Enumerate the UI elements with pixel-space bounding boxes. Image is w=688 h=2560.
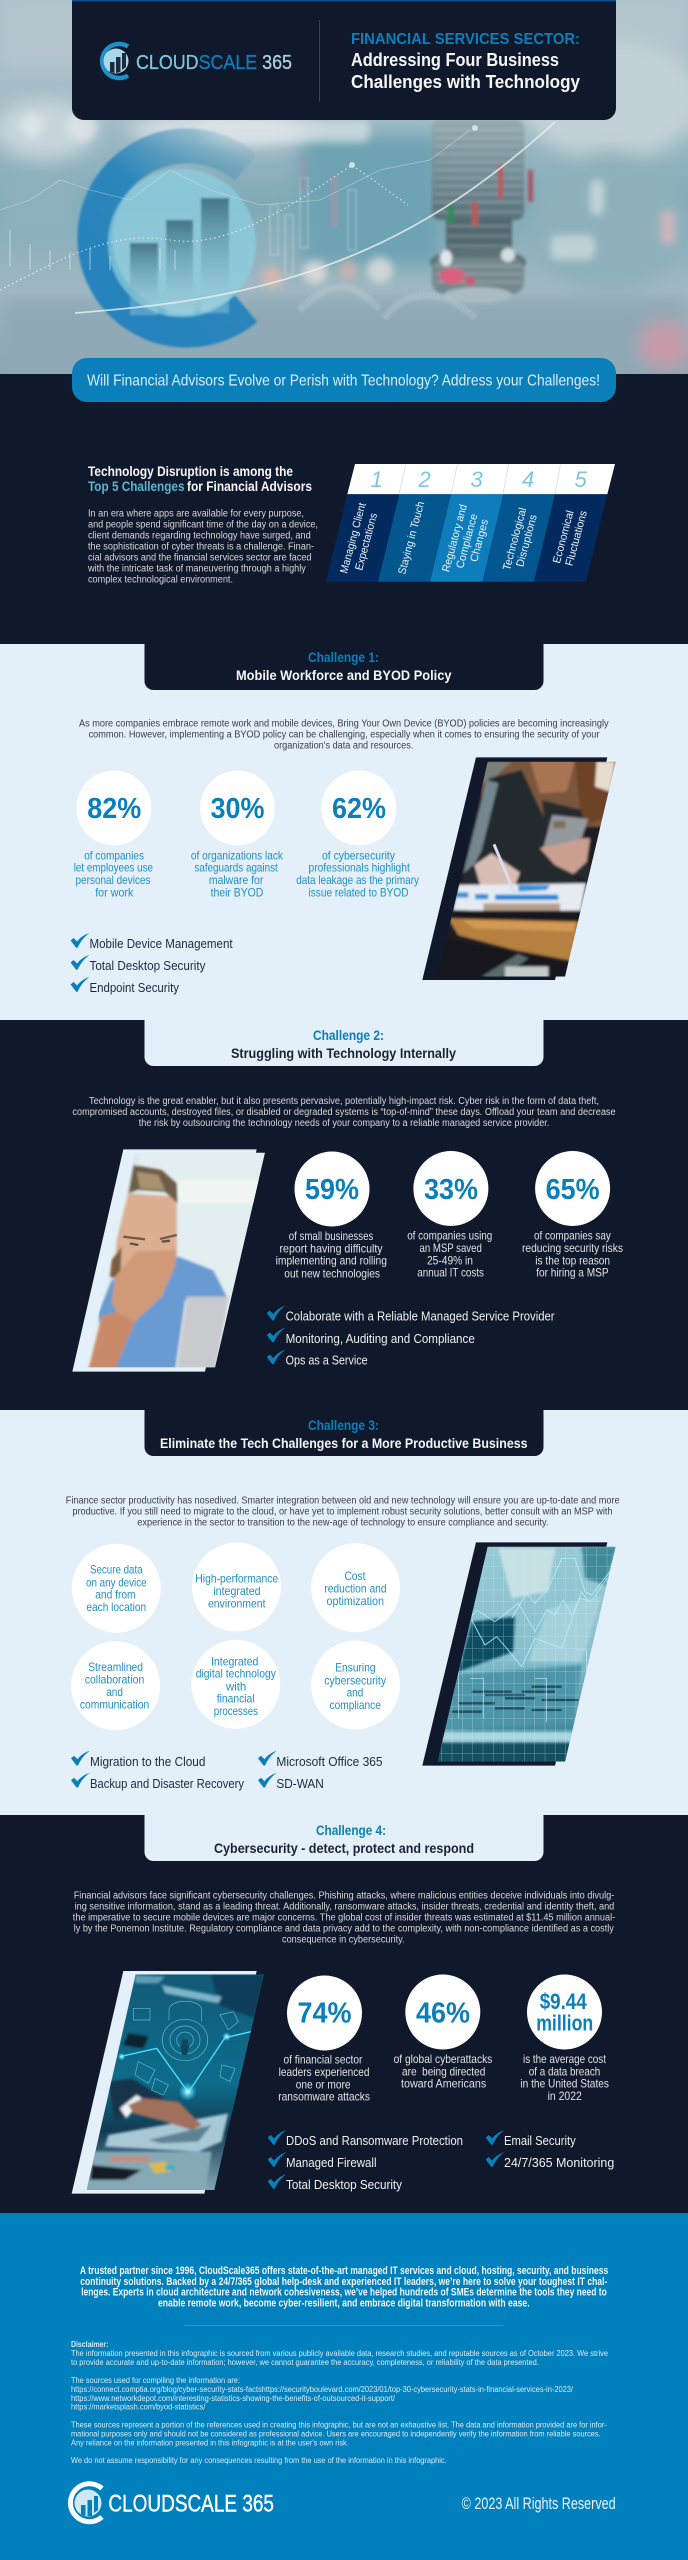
- stat: $9.44 million: in 2022: [548, 2090, 582, 2103]
- stat: 65%: reducing security risks: [522, 1242, 623, 1255]
- stat: 30%: safeguards against: [194, 862, 278, 875]
- benefit: cost reduction: Cost: [344, 1570, 366, 1583]
- stat: 62%: [296, 770, 419, 899]
- top 5 challenges table: Regulatory and: [440, 503, 470, 573]
- panel: challenge 4: [72, 1815, 615, 2194]
- intro body text: with the intricate task of maneuvering through a highly: [87, 563, 306, 574]
- stat: 65%: [522, 1151, 623, 1280]
- stat: 74%: 74%: [298, 1998, 352, 2030]
- top 5 challenges table: Compliance: [454, 513, 480, 570]
- stat: 30%: [191, 770, 283, 899]
- challenge 4 text: consequence in cybersecurity.: [282, 1935, 405, 1946]
- checklist: challenge 4 services: DDoS and Ransomware Protection: [286, 2133, 463, 2148]
- checklist: challenge 2 services: Monitoring, Auditing and Compliance: [286, 1331, 475, 1346]
- stat: 62%: 62%: [332, 793, 386, 825]
- challenge 2 text: the risk by outsourcing the technology needs of your company to a reliable managed service provider.: [139, 1118, 549, 1129]
- heading tab: challenge 4: Cybersecurity - detect, protect and respond: [214, 1840, 474, 1856]
- photo: woman with phone: [422, 757, 622, 980]
- checklist: challenge 1 services: [71, 933, 233, 995]
- big logo C ring: [95, 146, 256, 330]
- stat: 46%: of global cyberattacks: [394, 2053, 492, 2066]
- checklist: challenge 1 services: Endpoint Security: [90, 980, 179, 995]
- stat: 59%: report having difficulty: [280, 1242, 383, 1255]
- challenge 3 text: [66, 1496, 620, 1529]
- intro body text: client demands regarding technology have surged, and: [88, 530, 311, 541]
- stat: 74%: one or more: [296, 2078, 351, 2091]
- intro body text: cial advisors and the financial services sector are faced: [88, 552, 312, 563]
- stat: 82%: let employees use: [74, 862, 153, 875]
- dark intro band background: [0, 374, 688, 644]
- benefit: secure data: and from: [95, 1589, 136, 1602]
- stat: 59%: [276, 1152, 387, 1280]
- intro heading: [88, 463, 312, 494]
- checklist: challenge 1 services: Total Desktop Security: [90, 958, 206, 973]
- top 5 challenges table: [326, 464, 615, 582]
- checklist: challenge 4 services: Total Desktop Security: [286, 2177, 402, 2192]
- benefit: cost reduction: optimization: [326, 1595, 384, 1608]
- stat: 33%: an MSP saved: [420, 1242, 482, 1255]
- disclaimer: These sources represent a portion of the references used in creating this infographic, but are not an exhaustive list. The data and information provided are for infor-: [71, 2420, 607, 2430]
- intro body text: In an era where apps are available for every purpose,: [88, 508, 304, 519]
- benefit: secure data: on any device: [86, 1576, 147, 1589]
- challenge 2 text: Technology is the great enabler, but it also presents pervasive, potentially high-impact risk. Cyber risk in the form of data theft,: [89, 1096, 599, 1107]
- heading tab: challenge 2: Struggling with Technology Internally: [231, 1045, 456, 1061]
- disclaimer: The information presented in this infographic is sourced from various publicly available data, research studies, and reputable sources as of October 2023. We strive: [71, 2349, 609, 2358]
- stat: 30%: their BYOD: [211, 886, 263, 899]
- benefit: cybersecurity and compliance: cybersecurity: [324, 1674, 386, 1687]
- stat: 33%: 33%: [424, 1174, 478, 1206]
- top 5 challenges table: Managing Client: [338, 502, 369, 575]
- photo: laptop with financial chart overlay: [422, 1542, 622, 1766]
- photo: worried man at laptop: [72, 1149, 272, 1372]
- heading tab: challenge 3: Challenge 3:: [308, 1417, 379, 1433]
- benefit: collaboration: [71, 1641, 160, 1730]
- stat: $9.44 million: million: [536, 2010, 593, 2036]
- checklist: challenge 3 services: [71, 1751, 383, 1791]
- checklist: challenge 2 services: [267, 1306, 555, 1368]
- challenge 2 text: compromised accounts, destroyed files, or disabled or degraded systems is “top-of-mind” these days. Offload your team and decrease: [72, 1107, 616, 1118]
- challenge 4 text: [73, 1890, 615, 1946]
- heading tab: challenge 2: Challenge 2:: [313, 1027, 384, 1043]
- company statement: [80, 2265, 608, 2310]
- checklist: challenge 4 services: Managed Firewall: [286, 2155, 377, 2170]
- question banner pill: [72, 358, 616, 402]
- challenge 4 text: Financial advisors face significant cybersecurity challenges. Phishing attacks, where malicious entities deceive individuals into divulg-: [74, 1890, 614, 1901]
- benefit: secure data: Secure data: [90, 1564, 143, 1577]
- benefit: collaboration: Streamlined: [88, 1661, 143, 1674]
- top 5 challenges table: 1: [370, 467, 383, 492]
- benefit: integrated digital technology: processes: [214, 1705, 258, 1718]
- stat: 82%: for work: [95, 886, 134, 899]
- intro body text: and people spend significant time of the day on a device,: [88, 519, 318, 530]
- stat: 62%: issue related to BYOD: [308, 886, 408, 899]
- benefit: integrated digital technology: Integrated: [211, 1655, 258, 1668]
- stat: 74%: [278, 1976, 370, 2104]
- heading tab: challenge 2: [144, 1020, 544, 1066]
- stat: 59%: 59%: [305, 1174, 359, 1206]
- checklist: challenge 3 services: Migration to the Cloud: [90, 1754, 205, 1769]
- panel: challenge 3: [0, 1410, 688, 1815]
- intro body text: [87, 508, 318, 586]
- challenge 3 text: productive. If you still need to migrate to the cloud, or have yet to implement robust security solutions, better consult with an MSP with: [72, 1506, 612, 1517]
- stat: $9.44 million: [520, 1974, 609, 2103]
- stat: 74%: ransomware attacks: [278, 2091, 370, 2104]
- disclaimer: https://connect.comptia.org/blog/cyber-security-stats-factshttps://securityboulevard.com/2023/01/top-30-cybersecurity-stats-in-financial-services-in-2023/: [71, 2385, 574, 2394]
- stat: $9.44 million: is the average cost: [523, 2053, 607, 2066]
- stat: 65%: for hiring a MSP: [536, 1267, 609, 1280]
- stat: 82%: personal devices: [76, 874, 151, 887]
- disclaimer: The sources used for compiling the information are:: [71, 2376, 240, 2385]
- stat: 46%: toward Americans: [401, 2078, 486, 2091]
- stat: 33%: 25-49% in: [427, 1254, 473, 1267]
- intro heading: Technology Disruption is among the: [88, 463, 293, 479]
- stat: 65%: 65%: [546, 1174, 600, 1206]
- top 5 challenges table: 2: [418, 467, 431, 492]
- stat: 62%: professionals highlight: [308, 862, 410, 875]
- benefit: cybersecurity and compliance: Ensuring: [335, 1662, 376, 1675]
- benefit: cost reduction: [311, 1543, 400, 1632]
- stat: 82%: of companies: [84, 849, 144, 862]
- challenge 3 text: experience in the sector to transition to the new-age of technology to ensure compliance and security.: [137, 1518, 549, 1529]
- stat: 33%: [407, 1151, 492, 1280]
- challenge 4 text: ing sensitive information, stand as a leading threat. Additionally, ransomware attacks, insider threats, credential and identity theft, and: [75, 1901, 614, 1912]
- benefit: cost reduction: reduction and: [324, 1583, 387, 1596]
- benefit: secure data: each location: [86, 1601, 146, 1614]
- stat: 62%: data leakage as the primary: [296, 874, 419, 887]
- disclaimer: to provide accurate and up-to-date information; however, we cannot guarantee the accuracy, completeness, or reliability of the data presented.: [71, 2358, 539, 2367]
- challenge 2 text: [72, 1096, 616, 1129]
- benefit: cybersecurity and compliance: and: [347, 1687, 363, 1700]
- stat: 82%: 82%: [87, 793, 141, 825]
- top 5 challenges table: 3: [470, 467, 484, 492]
- benefit: high-performance: [192, 1542, 281, 1632]
- checklist: challenge 4 services: 24/7/365 Monitoring: [504, 2155, 614, 2170]
- disclaimer: [71, 2340, 609, 2465]
- stat: 74%: of financial sector: [284, 2053, 363, 2066]
- top 5 challenges table: Economical: [551, 509, 577, 565]
- logo: CloudScale 365: CLOUDSCALE 365: [136, 52, 292, 74]
- benefit: secure data: [72, 1544, 161, 1633]
- disclaimer: mational purposes only and should not be considered as professional advice. Users are encouraged to independently verify the information from reliable sources.: [71, 2430, 601, 2438]
- benefit: high-performance: environment: [208, 1597, 266, 1610]
- candlesticks: [270, 155, 356, 275]
- heading tab: challenge 1: Challenge 1:: [308, 649, 379, 665]
- benefit: cybersecurity and compliance: [311, 1640, 400, 1730]
- hero background photo: coins and finance charts: [0, 0, 688, 374]
- stat: 59%: of small businesses: [289, 1230, 374, 1243]
- challenge 1 text: As more companies embrace remote work and mobile devices, Bring Your Own Device (BYOD) policies are becoming increasingly: [79, 718, 609, 729]
- top 5 challenges table: 4: [522, 467, 534, 492]
- checklist: challenge 2 services: Colaborate with a Reliable Managed Service Provider: [286, 1308, 555, 1324]
- challenge 4 text: the imperative to secure mobile devices are major concerns. The global cost of insider threats was estimated at $11.45 million annual-: [73, 1912, 615, 1923]
- checklist: challenge 4 services: [268, 2130, 614, 2192]
- stat: 33%: of companies using: [407, 1230, 492, 1243]
- heading tab: challenge 4: [144, 1815, 544, 1861]
- benefit: integrated digital technology: with: [225, 1680, 246, 1693]
- benefit: high-performance: High-performance: [195, 1572, 278, 1585]
- top 5 challenges table: Changes: [468, 518, 491, 563]
- benefit: collaboration: collaboration: [85, 1674, 144, 1687]
- checklist: challenge 4 services: Email Security: [504, 2133, 576, 2148]
- benefit: integrated digital technology: financial: [217, 1693, 254, 1706]
- stat: $9.44 million: $9.44: [540, 1989, 587, 2014]
- stat: 46%: [394, 1974, 492, 2091]
- stat: 30%: of organizations lack: [191, 849, 283, 862]
- intro body text: complex technological environment.: [88, 575, 233, 586]
- panel: footer: [0, 2213, 688, 2560]
- checklist: challenge 3 services: SD-WAN: [276, 1776, 324, 1791]
- title: FINANCIAL SERVICES SECTOR:: [351, 31, 580, 48]
- top 5 challenges table: Staying in Touch: [396, 500, 427, 576]
- top 5 challenges table: Technological: [501, 506, 529, 572]
- disclaimer: https://marketsplash.com/byod-statistics/: [71, 2402, 206, 2412]
- checklist: challenge 3 services: Backup and Disaster Recovery: [90, 1776, 244, 1791]
- disclaimer: https://www.networkdepot.com/interesting-statistics-showing-the-benefits-of-outsourced-it-support/: [71, 2394, 396, 2403]
- checklist: challenge 3 services: Microsoft Office 365: [276, 1754, 383, 1769]
- checklist: challenge 2 services: Ops as a Service: [286, 1352, 368, 1368]
- top 5 challenges table: 5: [574, 467, 588, 492]
- stat: $9.44 million: of a data breach: [529, 2065, 600, 2078]
- challenge 1 text: organization's data and resources.: [274, 740, 413, 751]
- heading tab: challenge 4: Challenge 4:: [316, 1822, 386, 1838]
- benefit: collaboration: communication: [80, 1698, 149, 1711]
- copyright: © 2023 All Rights Reserved: [462, 2495, 616, 2513]
- stat: $9.44 million: in the United States: [520, 2078, 609, 2091]
- intro body text: the sophistication of cyber threats is a challenge. Finan-: [88, 541, 314, 552]
- stat: 59%: implementing and rolling: [276, 1255, 387, 1268]
- intro heading: Top 5 Challenges: [88, 478, 185, 494]
- benefit: high-performance: integrated: [213, 1585, 261, 1598]
- stat: 30%: 30%: [210, 793, 265, 825]
- benefit: integrated digital technology: digital technology: [196, 1668, 276, 1681]
- heading tab: challenge 1: [144, 644, 544, 690]
- title: [351, 31, 581, 92]
- disclaimer: We do not assume responsibility for any consequences resulting from the use of the information in this infographic.: [71, 2456, 447, 2465]
- coin stack: [430, 120, 533, 303]
- title: Challenges with Technology: [351, 71, 581, 92]
- stat: 62%: of cybersecurity: [322, 849, 395, 862]
- logo: CloudScale 365: [102, 44, 292, 78]
- intro heading: for Financial Advisors: [187, 478, 312, 494]
- stat: 46%: are being directed: [402, 2065, 485, 2078]
- top 5 challenges table: Expectations: [353, 511, 380, 572]
- photo: digital padlock and hand on laptop: [72, 1971, 272, 2194]
- disclaimer: Disclaimer:: [71, 2340, 108, 2349]
- stat: 82%: [74, 770, 153, 899]
- heading tab: challenge 3: [144, 1410, 544, 1456]
- growth curve and chart lines: [0, 122, 555, 313]
- top 5 challenges table: Disruptions: [514, 513, 540, 568]
- title: Addressing Four Business: [351, 49, 559, 70]
- footer logo: [70, 2484, 274, 2522]
- benefit: cybersecurity and compliance: compliance: [330, 1699, 381, 1712]
- benefit: integrated digital technology: [191, 1640, 280, 1729]
- benefit: collaboration: and: [106, 1686, 123, 1699]
- company statement: enable remote work, become cyber-resilient, and embrace digital transformation with ease.: [158, 2298, 530, 2310]
- stat: 33%: annual IT costs: [417, 1267, 484, 1280]
- footer logo: CLOUDSCALE 365: [108, 2490, 274, 2518]
- panel: challenge 1: [0, 644, 688, 1020]
- challenge 1 text: [79, 718, 609, 751]
- top 5 challenges table: Fluctuations: [564, 509, 590, 567]
- challenge 3 text: Finance sector productivity has nosedived. Smarter integration between old and new technology will ensure you are up-to-date and more: [66, 1496, 620, 1507]
- header panel: [72, 0, 616, 120]
- stat: 30%: malware for: [209, 874, 263, 887]
- question banner pill: Will Financial Advisors Evolve or Perish with Technology? Address your Challenges!: [87, 372, 600, 390]
- challenge 1 text: common. However, implementing a BYOD policy can be challenging, especially when it comes to ensuring the security of your: [89, 729, 600, 740]
- stat: 59%: out new technologies: [284, 1267, 380, 1280]
- stat: 46%: 46%: [416, 1998, 470, 2030]
- stat: 65%: of companies say: [534, 1230, 611, 1243]
- stat: 65%: is the top reason: [535, 1254, 610, 1267]
- challenge 4 text: ly by the Ponemon Institute. Regulatory compliance and data privacy add to the complexity, with non-compliance identified as a costly: [74, 1924, 614, 1935]
- checklist: challenge 1 services: Mobile Device Management: [90, 936, 233, 951]
- panel: challenge 2: [72, 1020, 623, 1372]
- disclaimer: Any reliance on the information presented in this infographic is at the user's own risk.: [71, 2438, 349, 2448]
- heading tab: challenge 3: Eliminate the Tech Challenges for a More Productive Business: [160, 1435, 528, 1451]
- heading tab: challenge 1: Mobile Workforce and BYOD Policy: [236, 667, 452, 683]
- stat: 74%: leaders experienced: [279, 2066, 370, 2079]
